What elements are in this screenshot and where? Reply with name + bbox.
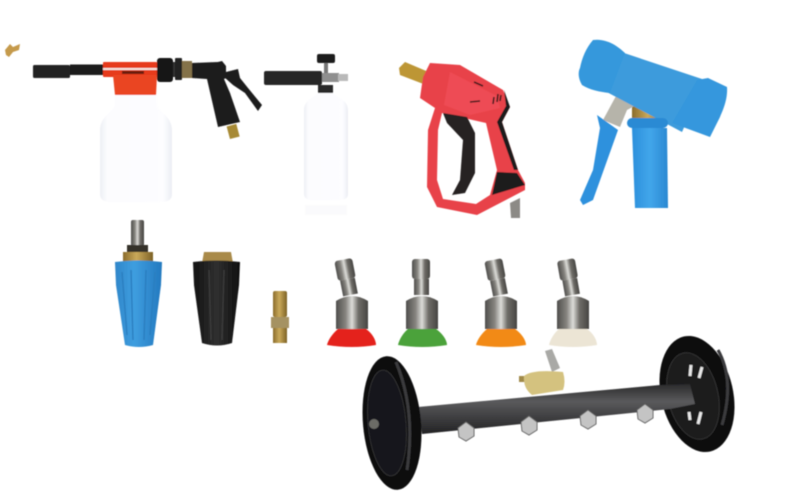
slim white bottle bbox=[304, 93, 348, 200]
bottle cap bbox=[318, 85, 333, 93]
silver lever bbox=[603, 95, 640, 127]
barrel body bbox=[603, 50, 705, 132]
blue water nozzle gun bbox=[579, 40, 727, 208]
right wheel bbox=[649, 328, 745, 460]
body shading bbox=[444, 72, 500, 115]
blue lever bbox=[580, 115, 618, 205]
black spray gun handle bbox=[192, 61, 262, 127]
large white bottle bbox=[100, 95, 172, 202]
red pressure washer gun bbox=[399, 62, 525, 218]
green nozzle tip bbox=[398, 259, 447, 347]
red body and frame bbox=[420, 63, 525, 215]
left barrel cap bbox=[579, 40, 625, 93]
black back strip bbox=[497, 90, 518, 170]
icon: small brass fitting bbox=[5, 44, 20, 57]
left wheel bbox=[357, 354, 427, 492]
surface cleaner wand bbox=[357, 328, 745, 492]
black foam barrel bbox=[264, 71, 322, 85]
horizontal bar bbox=[418, 384, 695, 434]
grip vents bbox=[470, 82, 501, 104]
orange nozzle tip bbox=[476, 258, 526, 347]
foam cannon with slim bottle bbox=[264, 54, 348, 215]
blue grip handle bbox=[627, 118, 668, 208]
brass swivel bbox=[519, 349, 564, 395]
red nozzle tip bbox=[327, 258, 376, 347]
brass inlet bbox=[399, 62, 431, 85]
black lower grip bbox=[492, 172, 525, 195]
black trigger bbox=[443, 113, 475, 195]
black turbo nozzle bbox=[193, 252, 240, 346]
black lance bbox=[33, 64, 103, 78]
right barrel cap bbox=[672, 78, 727, 137]
silver outlet bbox=[510, 198, 520, 218]
blue turbo nozzle bbox=[115, 220, 162, 347]
connector and brass coupling bbox=[157, 58, 192, 82]
spray nozzles bbox=[458, 404, 653, 441]
brass hose end bbox=[227, 124, 240, 139]
red foam head bbox=[103, 62, 157, 95]
adjuster knob bbox=[317, 54, 335, 73]
quick connector bbox=[322, 73, 348, 82]
cream nozzle tip bbox=[549, 258, 597, 347]
bottle reflection bbox=[305, 205, 347, 215]
brass collar bbox=[632, 105, 667, 121]
foam gun with large bottle bbox=[33, 58, 262, 202]
brass adapter bbox=[271, 291, 289, 343]
